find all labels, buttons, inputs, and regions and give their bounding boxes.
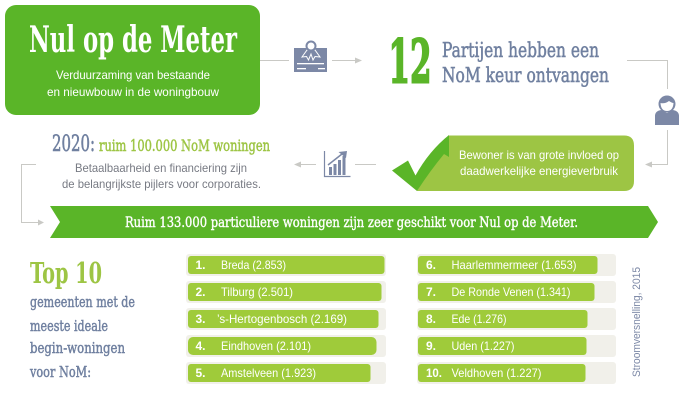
arrow: to resident panel (645, 162, 652, 168)
text: resident (459, 148, 619, 178)
source note: Stroomversnelling, 2015 (631, 267, 643, 377)
text: partijen (442, 38, 609, 87)
chart: ranking 1 to 5: 1. (196, 258, 206, 272)
text: financing (62, 161, 261, 191)
heading: Top 10: Top 10 (30, 256, 102, 290)
heading: 2020 target: 2020: (52, 132, 95, 157)
chart: ranking 6 to 10: 7. (426, 285, 436, 299)
heading: 2020 target: ruim 100.000 NoM woningen (99, 137, 270, 155)
text: resident: Bewoner is van grote invloed op (459, 148, 619, 162)
subtitle (47, 68, 219, 99)
arrow: to banner (38, 220, 44, 226)
chart: ranking 1 to 5: 5. (196, 366, 206, 380)
text: top 10 description: meeste ideale (30, 319, 108, 335)
chart: ranking 1 to 5: Tilburg (2.501) (221, 285, 293, 299)
chart: ranking 1 to 5 (186, 254, 386, 384)
subtitle: Verduurzaming van bestaande (56, 68, 210, 82)
chart: ranking 1 to 5: Eindhoven (2.101) (221, 339, 311, 353)
text: partijen: Partijen hebben een (442, 38, 599, 62)
chart: ranking 1 to 5: 2. (196, 285, 206, 299)
chart: ranking 1 to 5: ’s-Hertogenbosch (2.169) (217, 312, 347, 326)
chart: ranking 6 to 10: Ede (1.276) (452, 312, 506, 326)
icon: person (655, 96, 679, 125)
chart: ranking 1 to 5: Breda (2.853) (221, 258, 286, 272)
icon: check mark (392, 135, 449, 191)
chart: ranking 6 to 10: De Ronde Venen (1.341) (452, 285, 570, 299)
panel: title (5, 5, 260, 115)
chart: ranking 6 to 10 (417, 254, 616, 384)
chart: ranking 6 to 10: 8. (426, 312, 436, 326)
text: top 10 description: voor NoM: (29, 365, 91, 381)
text: resident: daadwerkelijke energieverbruik (460, 164, 619, 178)
banner (50, 206, 658, 238)
text: top 10 description (29, 295, 135, 381)
arrow: to partijen (355, 58, 362, 64)
text: financing: de belangrijkste pijlers voor corporaties. (62, 177, 261, 191)
heading: 2020 target (52, 132, 270, 157)
chart: ranking 1 to 5: 3. (196, 312, 206, 326)
chart: ranking 6 to 10: Haarlemmermeer (1.653) (452, 258, 576, 272)
chart: ranking 6 to 10: Veldhoven (1.227) (452, 366, 542, 380)
panel: resident (392, 135, 634, 191)
chart: ranking 6 to 10: Uden (1.227) (452, 339, 514, 353)
big number 12: 12 (388, 28, 432, 98)
text: top 10 description: begin-woningen (30, 341, 125, 357)
chart: ranking 1 to 5: Amstelveen (1.923) (221, 366, 316, 380)
chart: ranking 6 to 10: 10. (426, 366, 442, 380)
text: financing: Betaalbaarheid en financiering zijn (75, 161, 247, 175)
text: top 10 description: gemeenten met de (30, 295, 135, 311)
icon: certificate (294, 42, 327, 72)
subtitle: en nieuwbouw in de woningbouw (47, 85, 219, 99)
arrow: to 2020 text (294, 162, 301, 168)
heading: Nul op de Meter: Nul op de Meter (29, 19, 238, 61)
chart: ranking 6 to 10: 9. (426, 339, 436, 353)
chart: ranking 6 to 10: 6. (426, 258, 436, 272)
banner: Ruim 133.000 particuliere woningen zijn zeer geschikt voor Nul op de Meter. (125, 215, 578, 231)
text: partijen: NoM keur ontvangen (442, 63, 609, 87)
chart: ranking 1 to 5: 4. (196, 339, 206, 353)
icon: growth chart (324, 151, 350, 176)
